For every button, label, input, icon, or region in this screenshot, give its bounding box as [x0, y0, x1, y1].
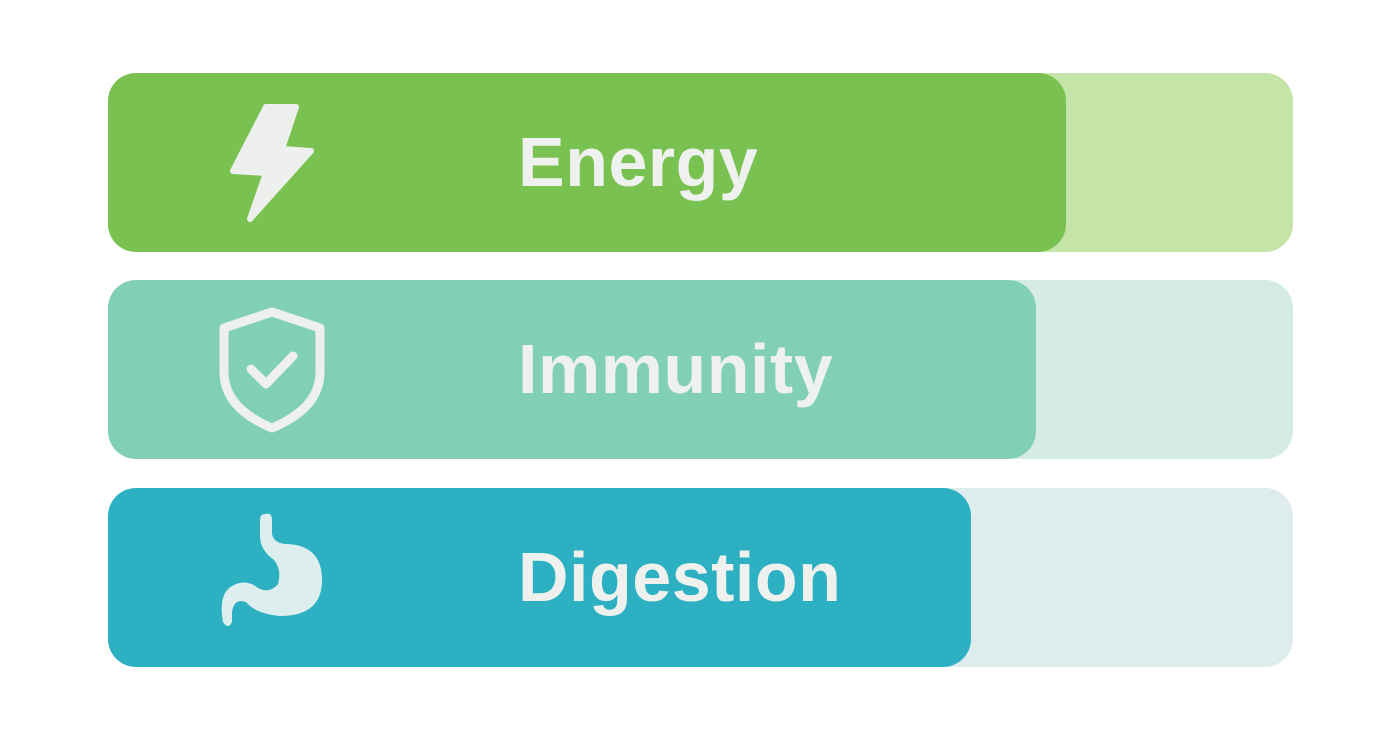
label: Immunity: Immunity: [518, 330, 833, 408]
panel: energy bar: [108, 73, 1293, 252]
label: Digestion: Digestion: [518, 538, 841, 616]
icon: shield with check: [220, 308, 324, 432]
immunity fill: [108, 280, 1036, 459]
panel: immunity bar: [108, 280, 1293, 459]
icon: lightning bolt: [230, 104, 314, 222]
digestion fill: [108, 488, 971, 667]
label: Energy: Energy: [518, 123, 758, 201]
panel: digestion bar: [108, 488, 1293, 667]
icon: stomach: [222, 514, 322, 626]
energy fill: [108, 73, 1066, 252]
